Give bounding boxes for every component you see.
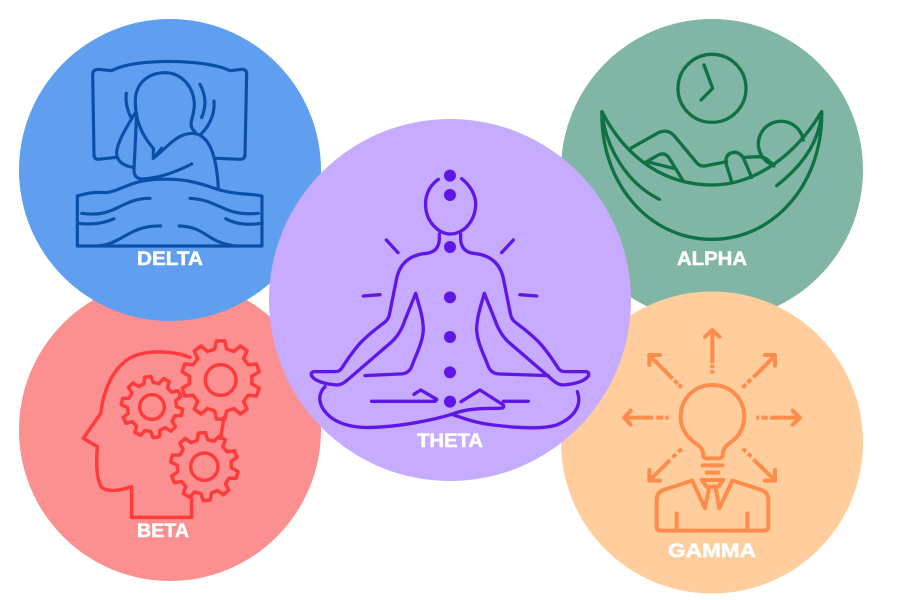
icon: person resting in hammock with clock [602, 54, 822, 239]
panel: beta [19, 279, 321, 581]
label: ALPHA: ALPHA [677, 249, 747, 270]
panel: gamma [561, 292, 863, 594]
icon: head with gears [83, 331, 270, 517]
icon: person sleeping in bed [77, 61, 262, 246]
panel: delta [19, 19, 321, 321]
icon: lightbulb head with radiating arrows [624, 330, 800, 531]
label: BETA: BETA [137, 521, 189, 542]
panel: theta [269, 119, 631, 481]
label: DELTA: DELTA [137, 249, 203, 270]
label: THETA: THETA [417, 431, 483, 452]
label: GAMMA: GAMMA [668, 541, 756, 562]
icon: meditating figure with chakra dots [311, 170, 589, 428]
panel: alpha [561, 19, 863, 321]
